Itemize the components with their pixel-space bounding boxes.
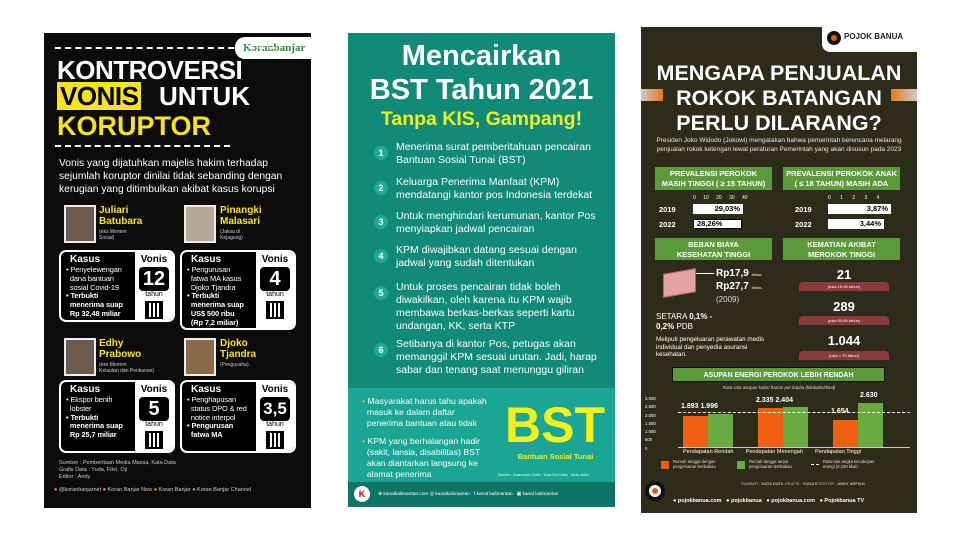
case box 2: tahun [266, 291, 284, 298]
source: Editor : Andy [59, 474, 90, 480]
person: Juliari: Batubara [99, 216, 142, 227]
case box 4: • Pengurusan [187, 421, 233, 430]
chart: prevalensi 15 [659, 195, 748, 229]
case box 1: tahun [145, 291, 163, 298]
title: MENGAPA PENJUALAN [657, 61, 901, 85]
title: PERLU DILARANG? [676, 111, 882, 135]
case box 1 [59, 250, 175, 322]
bar chart [645, 392, 910, 455]
logo: koranbanjar [235, 37, 315, 59]
bar chart: 2.335 2.404 [756, 397, 793, 404]
person: Juliari: (eks Menteri [99, 229, 127, 235]
person: Djoko: Djoko [220, 338, 248, 349]
steps list: 5 [378, 288, 384, 298]
header asupan [672, 367, 885, 382]
logo: pojok banua: POJOK BANUA [844, 32, 903, 41]
source [59, 460, 176, 480]
kematian block: (usia 50-69 tahun) [828, 318, 860, 323]
bottom section: Bantuan Sosial Tunai [518, 452, 593, 461]
case box 3: tahun [145, 421, 163, 428]
case box 2: Kasus [191, 254, 221, 265]
case box 2: menerima suap [191, 300, 244, 309]
case box 2: fatwa MA kasus [191, 274, 241, 283]
person: Juliari [64, 205, 142, 243]
panel: poster rokok: Rata-rata asupan kalori harian per kapita (kilokalori/kkal) [723, 385, 835, 390]
steps list: Untuk proses pencairan tidak boleh diwakilkan, oleh karena itu KPM wajib membawa berkas-berkas seperti kartu undangan, KK, serta KTP [396, 281, 575, 332]
case box 3: menerima suap [70, 421, 123, 430]
step 1 [374, 141, 591, 166]
bottom section: Sumber : Suara.com Grafis : Yuda Eka Editor : Andy Arfian [498, 473, 589, 477]
case box 4: Kasus [191, 384, 221, 395]
footer [348, 482, 615, 507]
case box 1: • Terbukti [66, 291, 98, 300]
steps list: Untuk menghindari kerumunan, kantor Pos menyiapkan jadwal pencairan [396, 210, 596, 235]
logo: koranbanjar: Koranbanjar [243, 42, 305, 54]
bar chart: 2.000 [645, 413, 656, 418]
title [370, 40, 593, 106]
steps list: 1 [378, 148, 384, 158]
source: SUMBER : KATA DATA GRAFIS : YUDA E EDITOR : ANDY ARFIAN [741, 481, 865, 486]
case box 2: Vonis [262, 254, 288, 265]
case box 2 [180, 250, 296, 330]
header beban: BEBAN BIAYA [688, 240, 739, 249]
steps list: 4 [378, 251, 384, 261]
case box 2: 4 [269, 268, 281, 290]
header prevalensi anak [783, 167, 900, 190]
case box 3: 5 [148, 398, 160, 420]
bar chart: 500 [645, 437, 652, 442]
case box 2: • Pengurusan [187, 265, 230, 274]
person: Edhy [64, 338, 154, 376]
steps list: 2 [378, 183, 384, 193]
kematian block: (usia > 70 tahun) [829, 353, 859, 358]
case box 2: (Rp 7,2 miliar) [191, 318, 238, 327]
beban biaya block: (2009) [716, 295, 739, 304]
case box 2: Djoko Tjandra [191, 283, 235, 292]
legend: energi (2.100 kkal) [823, 464, 858, 469]
title [657, 61, 901, 135]
beban biaya block [656, 268, 764, 358]
title: VONIS [60, 81, 138, 111]
steps list: Menerima surat pemberitahuan pencairan Bantuan Sosial Tunai (BST) [396, 141, 591, 166]
chart: prevalensi anak: 3,87% [867, 204, 888, 213]
source: Grafis Data : Yuda, Fikri, Oji [59, 467, 127, 473]
chart: prevalensi anak: 0 1 2 3 4 [828, 195, 879, 201]
case box 4: notice interpol [191, 413, 235, 422]
notes: akan diantarkan langsung ke [367, 458, 478, 468]
case box 3: Rp 25,7 miliar [70, 430, 117, 439]
title: ROKOK BATANGAN [676, 86, 882, 110]
chart: prevalensi anak: 2019 [795, 205, 812, 214]
source: Sumber : Pemberitaan Media Massa, Kata Data [59, 460, 176, 466]
legend: pengeluaran tembakau [673, 464, 716, 469]
person: Edhy: Prabowo [99, 349, 141, 360]
case box 4: • Penghapusan [187, 395, 236, 404]
notes: • Masyarakat harus tahu apakah [362, 396, 487, 406]
footer [645, 481, 864, 504]
bar chart: 1.000 [645, 429, 656, 434]
legend: pengeluaran tembakau [749, 464, 792, 469]
person: Djoko: (Pengusaha) [220, 362, 249, 368]
case box 1: menerima suap [70, 300, 123, 309]
steps list: Keluarga Penerima Manfaat (KPM) mendatangi kantor pos Indonesia terdekat [396, 176, 592, 201]
case box 4: status DPO & red [191, 404, 247, 413]
case box 1: Rp 32,48 miliar [70, 309, 121, 318]
case box 1: • Penyelewengan [66, 265, 122, 274]
header prevalensi anak: PREVALENSI PEROKOK ANAK [786, 169, 897, 178]
person: Edhy: Kelautan dan Perikanan) [99, 368, 154, 374]
steps list: 3 [378, 217, 384, 227]
notes: (sakit, lansia, disabilitas) BST [367, 447, 480, 457]
step 5 [374, 281, 575, 332]
person: Juliari: Juliari [99, 205, 128, 216]
person: Djoko: Tjandra [220, 349, 256, 360]
bar chart: 3.000 [645, 396, 656, 401]
notes: masuk ke dalam daftar [367, 407, 455, 417]
header kematian: MEROKOK TINGGI [808, 250, 875, 259]
step 4 [374, 244, 577, 269]
chart: prevalensi anak: 2022 [795, 220, 812, 229]
header kematian: KEMATIAN AKIBAT [807, 240, 876, 249]
person: Juliari: Sosial) [99, 235, 114, 241]
header beban: KESEHATAN TINGGI [677, 250, 750, 259]
bar chart: 0 [645, 446, 647, 451]
chart: prevalensi 15: 28,26% [697, 219, 722, 228]
header prevalensi 15: MASIH TINGGI ( ≥ 15 TAHUN) [662, 179, 765, 188]
chart: prevalensi 15: 2019 [659, 205, 676, 214]
notes: penerima bantuan atau tidak [367, 418, 477, 428]
chart: prevalensi 15: 2022 [659, 220, 676, 229]
steps list [374, 141, 597, 376]
case box 4: 3,5 [263, 399, 287, 418]
case box 4: fatwa MA [191, 430, 223, 439]
header kematian [783, 238, 900, 260]
footer social: ● @koranbanjarnet ● Koran Banjar New ● Koran Banjar ● Koran Banjar Channel [54, 487, 251, 493]
bar chart: 1.893 1.996 [681, 403, 718, 410]
steps list: KPM diwajibkan datang sesuai dengan jadwal yang sudah ditentukan [396, 244, 577, 269]
bar chart: 2.500 [645, 404, 656, 409]
chart: prevalensi anak: 3,44% [860, 219, 881, 228]
case box 2: • Terbukti [187, 291, 219, 300]
legend: Rumah tangga tanpa [749, 459, 788, 464]
panel: poster koruptor [44, 33, 311, 508]
legend: Rata-rata angka kecukupan [823, 459, 874, 464]
case box 2: US$ 500 ribu [191, 309, 234, 318]
header prevalensi 15: PREVALENSI PEROKOK [670, 169, 757, 178]
beban biaya block: Rp17,9 triliun- [716, 268, 762, 279]
header asupan: ASUPAN ENERGI PEROKOK LEBIH RENDAH [704, 372, 854, 379]
chart: prevalensi anak [795, 195, 891, 229]
case box 1: 12 [143, 268, 165, 290]
legend [661, 459, 874, 469]
case box 3: • Terbukti [66, 413, 98, 422]
title: KONTROVERSI [57, 55, 242, 85]
kematian block: (usia 15-49 tahun) [828, 284, 860, 289]
bar chart: 1.500 [645, 421, 656, 426]
logo: pojok banua [822, 27, 917, 52]
beban biaya block: Rp27,7 triliun- [716, 281, 762, 292]
kematian block: 289 [833, 299, 855, 314]
panel: poster BST [348, 33, 615, 507]
notes: • KPM yang berhalangan hadir [362, 436, 480, 446]
BST logo text: BST [505, 397, 605, 453]
person: Pinangki: Kejagung) [220, 235, 243, 241]
intro: Presiden Joko Widodo (Jokowi) mengatakan bahwa pemerintah berencana melarang penjualan rokok ketengan lewat peraturan Pemerintah yang akan disusun pada 2023 [656, 137, 902, 153]
title: KORUPTOR [57, 111, 211, 141]
person: Djoko [184, 338, 256, 376]
title: UNTUK [159, 81, 250, 111]
title [55, 47, 275, 147]
case box 1: Kasus [70, 254, 100, 265]
legend: Rumah tangga dengan [673, 459, 716, 464]
bar chart: Pendapatan Rendah Pendapatan Menengah Pendapatan Tinggi [683, 449, 861, 455]
notes: alamat penerima [367, 469, 432, 479]
case box 1: dana bantuan [70, 274, 114, 283]
chart: prevalensi 15: 29,03% [715, 204, 740, 213]
step 2 [374, 176, 592, 201]
case box 3: Vonis [141, 384, 167, 395]
step 3 [374, 210, 596, 235]
steps list: 6 [378, 345, 384, 355]
beban biaya block: 0,2% PDB [656, 322, 693, 331]
title: BST Tahun 2021 [370, 74, 593, 106]
subtitle: Tanpa KIS, Gampang! [381, 108, 582, 130]
header beban [655, 238, 772, 260]
footer: K [359, 489, 365, 499]
footer: ⊕ kanalkalimantan.com ◎ kanalkalimantan f kanal kalimantan ▣ kanal kalimantan [378, 492, 558, 497]
case box 3: • Ekspor benih [66, 395, 112, 404]
person: Edhy: (eks Menteri [99, 362, 127, 368]
case box 4: Vonis [262, 384, 288, 395]
bar chart: 2.630 [860, 392, 878, 399]
icon: money stack [663, 268, 696, 298]
kematian block: 21 [837, 267, 851, 282]
beban biaya block: SETARA 0,1% - [656, 312, 712, 321]
case box 3 [59, 380, 175, 453]
notes [362, 396, 487, 479]
bottom section [348, 388, 615, 482]
icon: cigarettes [641, 89, 663, 101]
case box 1: Vonis [141, 254, 167, 265]
case box 3: Kasus [70, 384, 100, 395]
person: Edhy: Edhy [99, 338, 123, 349]
intro text: Vonis yang dijatuhkan majelis hakim terhadap sejumlah koruptor dinilai tidak sebanding dengan kerugian yang ditimbulkan akibat kasus korupsi [59, 158, 282, 195]
case box 4 [180, 380, 296, 453]
kematian block: 1.044 [828, 333, 860, 348]
header prevalensi 15 [655, 167, 772, 190]
header prevalensi anak: ( ≤ 18 TAHUN) MASIH ADA [795, 179, 888, 188]
person: Pinangki: Pinangki [220, 205, 262, 216]
steps list: Setibanya di kantor Pos, petugas akan memanggil KPM sesuai urutan. Jadi, harap sabar dan tenang saat menunggu giliran [396, 338, 597, 376]
footer: ● pojokbanua.com ● pojokbanua ● pojokbanua.com ● Pojokbanua TV [673, 498, 864, 504]
chart: prevalensi 15: 0 10 20 30 40 [693, 195, 748, 201]
title: Mencairkan [402, 40, 561, 72]
case box 1: sosial Covid-19 [70, 283, 119, 292]
person: Pinangki: (Jaksa di [220, 229, 240, 235]
case box 3: lobster [70, 404, 91, 413]
panel: poster rokok [641, 27, 917, 513]
beban biaya block: Meliputi pengeluaran perawatan medis individual dan penyedia asuransi kesehatan. [656, 336, 764, 358]
kematian block [799, 267, 889, 360]
case box 4: tahun [266, 421, 284, 428]
bar chart: 1.654 [831, 408, 849, 415]
person: Pinangki [184, 205, 262, 243]
step 6 [374, 338, 597, 376]
person: Pinangki: Malasari [220, 216, 260, 227]
